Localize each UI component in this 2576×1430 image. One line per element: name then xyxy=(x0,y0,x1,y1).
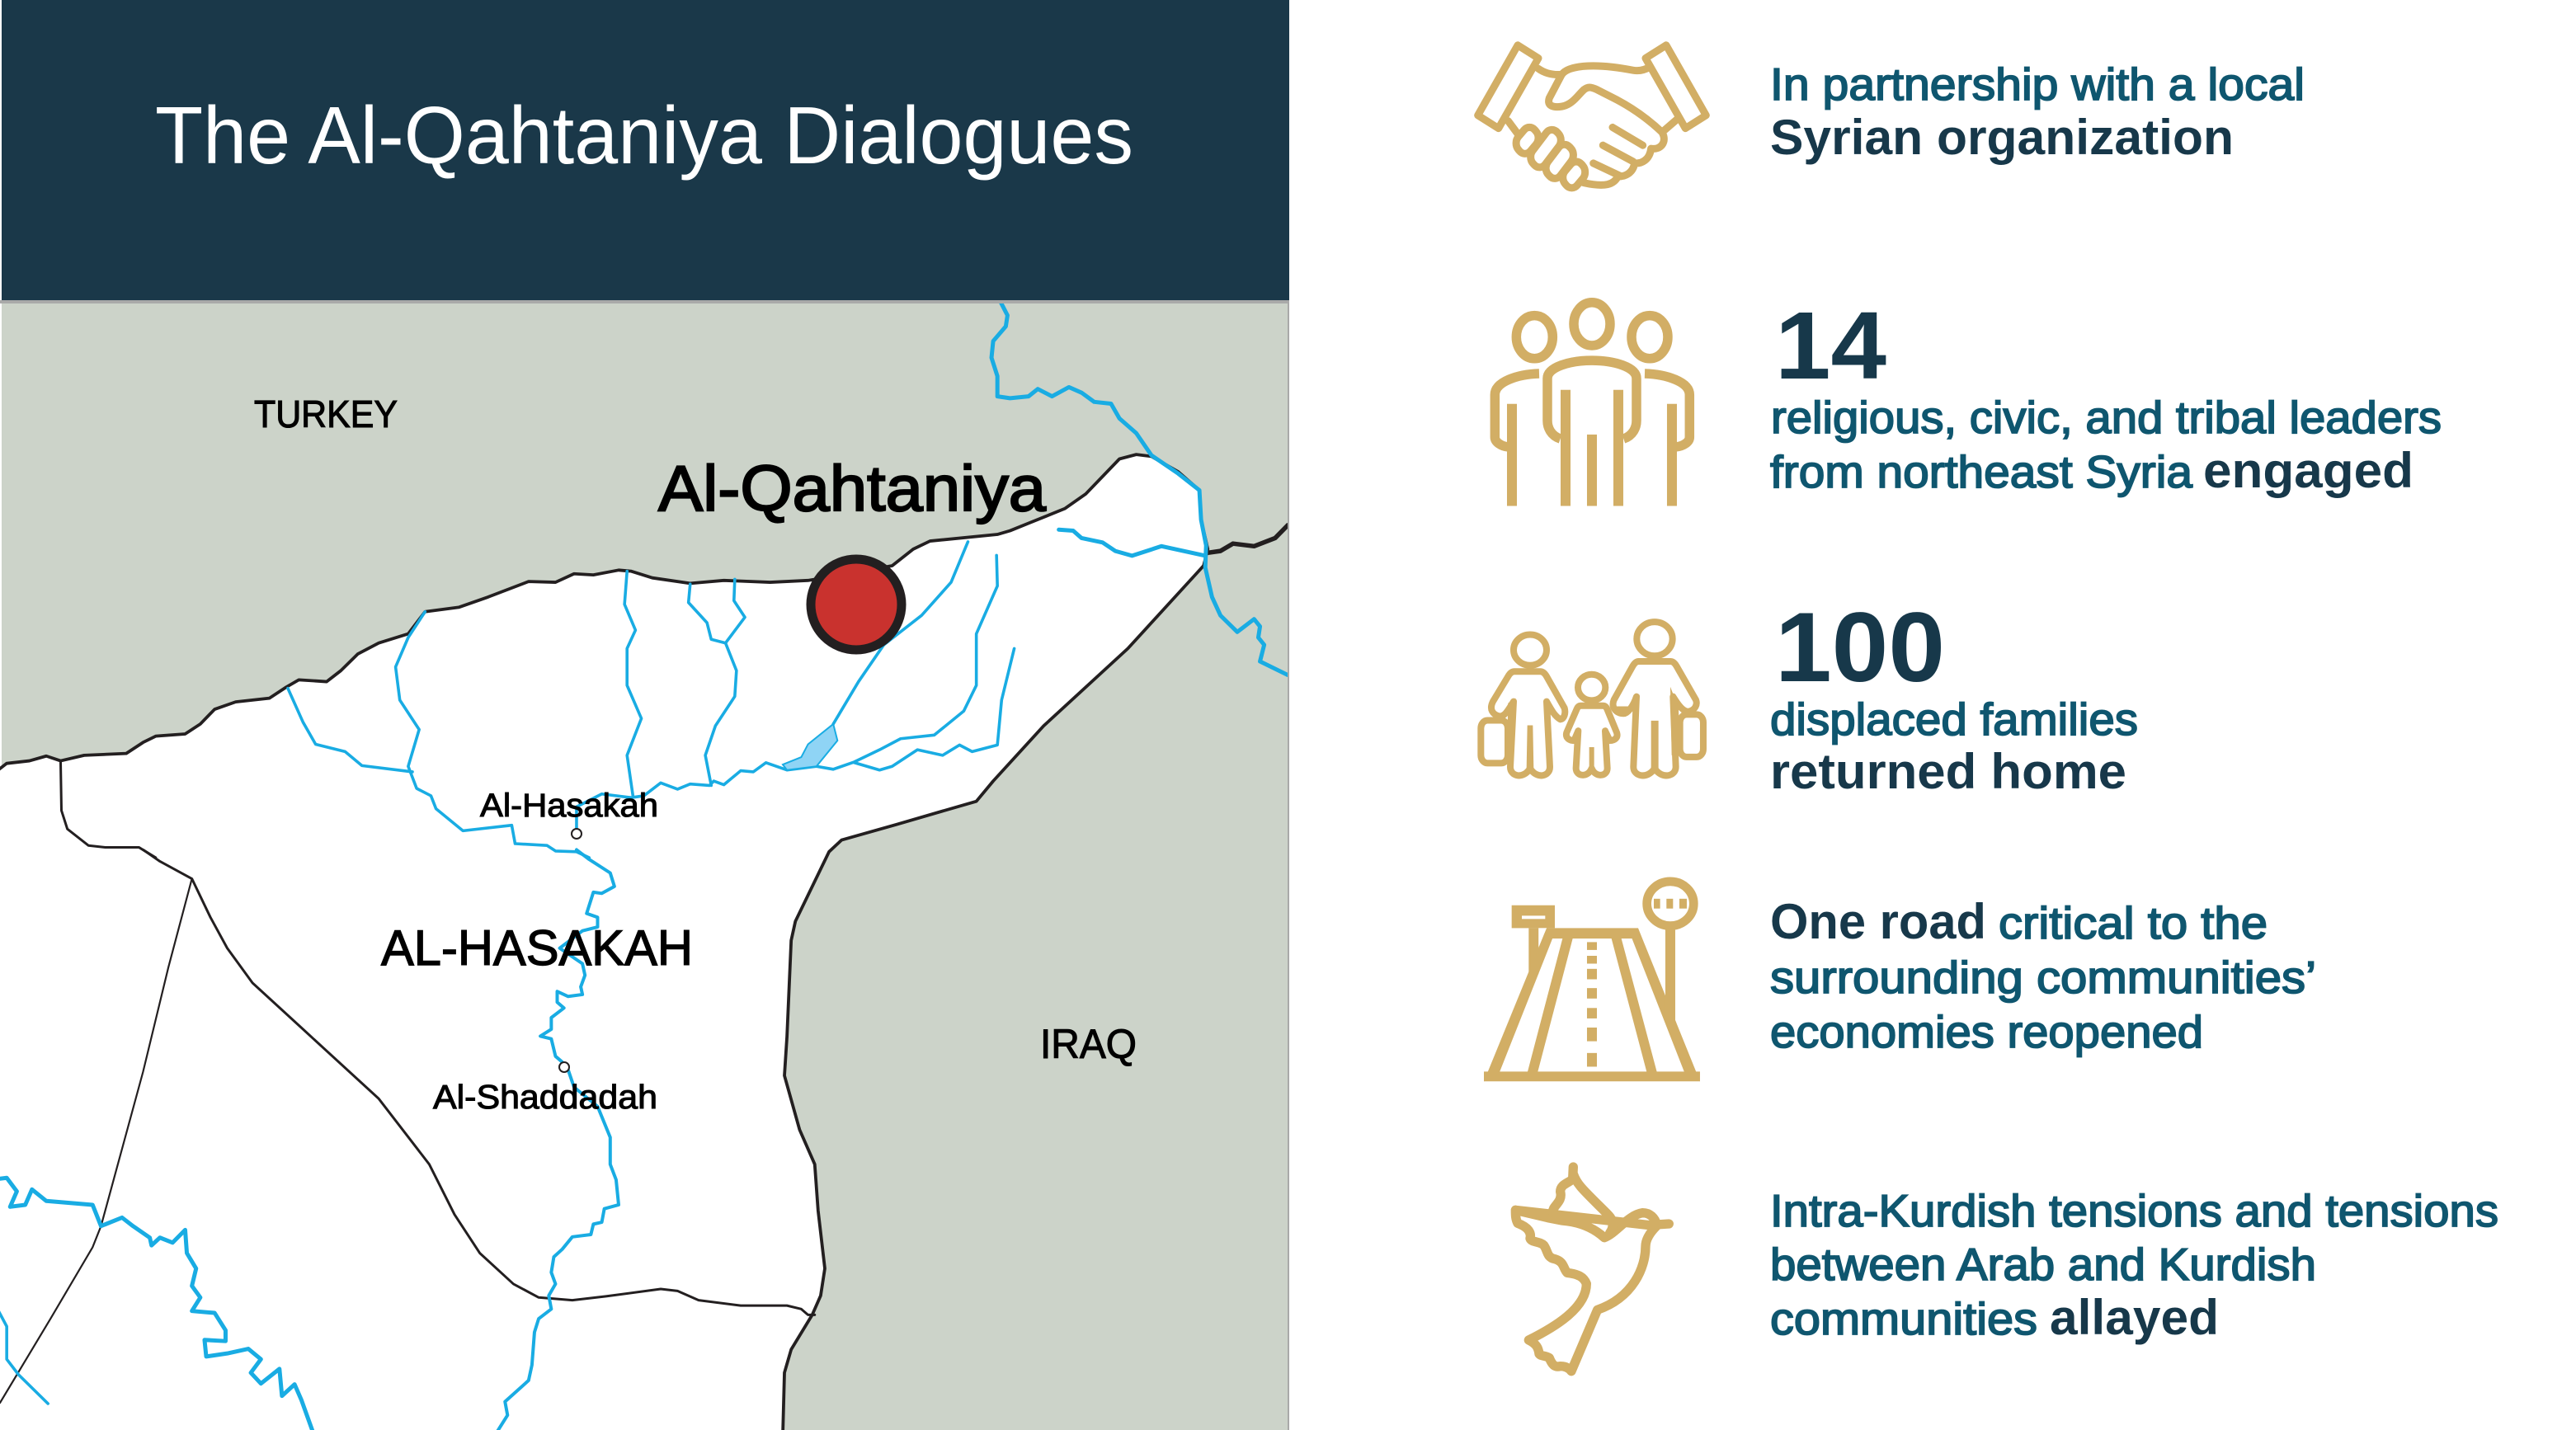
icon: three people xyxy=(1495,303,1689,506)
label: Turkey: TURKEY xyxy=(254,393,398,435)
marker: Al-Qahtaniya xyxy=(811,559,902,650)
icon: road with signs xyxy=(1484,882,1700,1081)
region: Syria land and borders xyxy=(0,454,1208,1430)
text: partnership: In partnership with a local xyxy=(1770,59,2305,110)
text: road reopened: surrounding communities’ xyxy=(1770,952,2316,1003)
label: Al-Hasakah city: Al-Hasakah xyxy=(480,788,658,824)
item: families returned xyxy=(1481,592,2138,799)
map right edge line xyxy=(1288,302,1289,1430)
text: road reopened: One road xyxy=(1770,894,1986,949)
rivers north of Al-Hasakah xyxy=(60,301,1296,858)
item: road reopened xyxy=(1484,882,2316,1081)
icon: family with luggage xyxy=(1481,622,1703,775)
text: partnership xyxy=(1770,59,2305,165)
text: tensions allayed: communities xyxy=(1770,1293,2037,1344)
text: tensions allayed xyxy=(1770,1185,2498,1345)
item: tensions allayed xyxy=(1515,1167,2498,1371)
text: leaders engaged: from northeast Syria xyxy=(1770,446,2192,497)
text: leaders engaged: engaged xyxy=(2203,443,2414,498)
frame line under header xyxy=(0,300,1289,303)
icon: dove xyxy=(1515,1167,1669,1371)
text: leaders engaged: 14 xyxy=(1775,292,1886,399)
label: Al-Hasakah governorate: AL-HASAKAH xyxy=(381,920,693,976)
text: tensions allayed: allayed xyxy=(2050,1290,2219,1345)
map shapes xyxy=(0,301,1296,1430)
text: families returned xyxy=(1770,592,2138,799)
title: The Al-Qahtaniya Dialogues xyxy=(155,90,1133,181)
panel: map xyxy=(0,300,1296,1430)
text: families returned: 100 xyxy=(1775,592,1945,703)
panel: title header xyxy=(2,0,1289,300)
city dot: Al-Shaddadah xyxy=(559,1062,569,1072)
text: tensions allayed: Intra-Kurdish tensions and tensions xyxy=(1770,1185,2498,1236)
item: partnership xyxy=(1478,45,2305,191)
icon: handshake xyxy=(1478,45,1706,191)
item: leaders engaged xyxy=(1495,292,2442,506)
rivers and borders south of Al-Hasakah xyxy=(0,849,815,1430)
text: leaders engaged: religious, civic, and tribal leaders xyxy=(1771,392,2442,443)
city dot: Al-Hasakah xyxy=(572,829,582,839)
label: Al-Shaddadah: Al-Shaddadah xyxy=(433,1078,657,1116)
text: leaders engaged xyxy=(1770,292,2442,498)
text: road reopened: critical to the xyxy=(1999,897,2268,948)
label: Al-Qahtaniya: Al-Qahtaniya xyxy=(658,452,1047,524)
text: partnership: Syrian organization xyxy=(1770,110,2234,165)
text: road reopened xyxy=(1770,894,2316,1057)
text: families returned: displaced families xyxy=(1770,694,2138,745)
label: Iraq: IRAQ xyxy=(1040,1021,1137,1067)
map background: neighbouring countries xyxy=(2,302,1288,1430)
text: tensions allayed: between Arab and Kurdish xyxy=(1770,1239,2316,1290)
text: road reopened: economies reopened xyxy=(1770,1006,2203,1057)
text: families returned: returned home xyxy=(1770,744,2126,799)
